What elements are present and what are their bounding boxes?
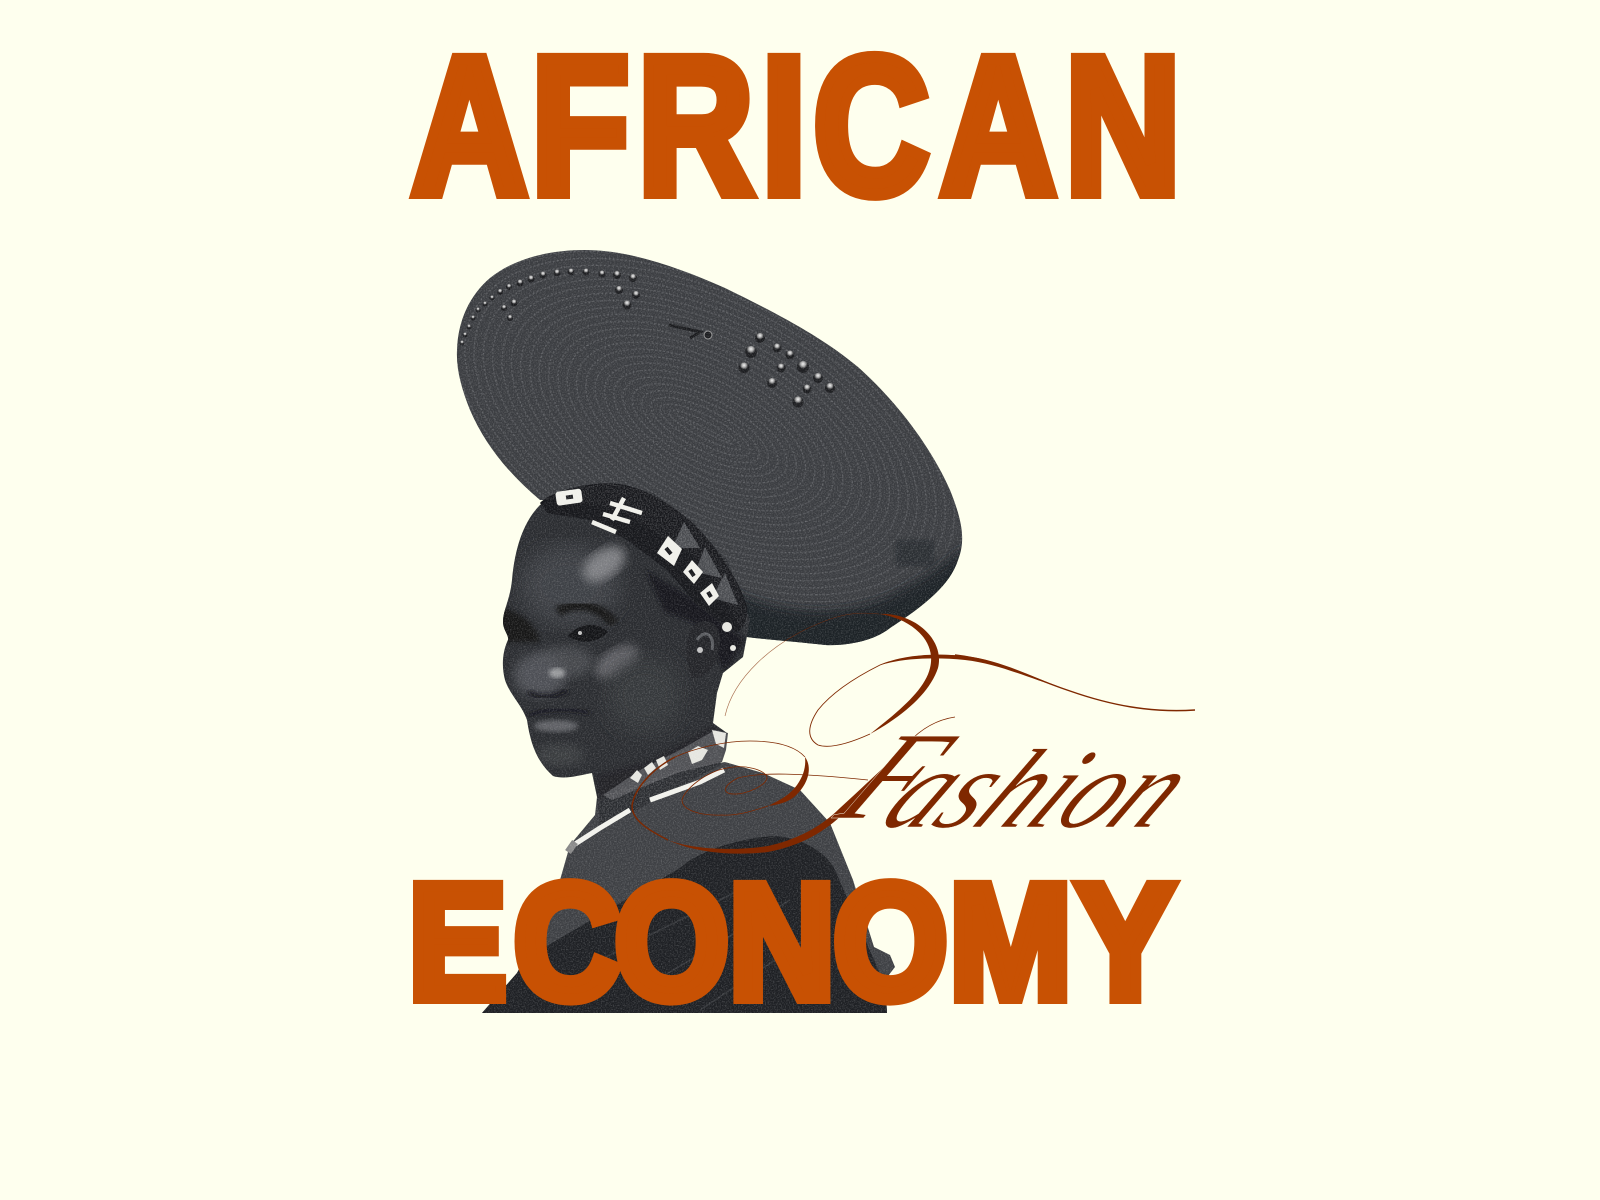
nose — [514, 653, 566, 697]
title: ECONOMY: ECONOMY — [409, 851, 1174, 1033]
beaded necklace — [568, 730, 728, 852]
word: ashion — [859, 727, 1223, 852]
photo grain — [440, 240, 980, 1020]
photo: woman with wide-brimmed hat — [363, 148, 1047, 1020]
shoulders and torso — [470, 760, 900, 1020]
hair — [645, 570, 745, 672]
neck shadow — [595, 725, 725, 800]
hat — [456, 250, 962, 646]
flourish: lower spiral — [632, 717, 955, 840]
lips — [528, 710, 590, 716]
ear — [686, 621, 720, 678]
flourish: upper loop — [725, 613, 1195, 746]
title: AFRICAN: AFRICAN — [412, 17, 1181, 235]
brows and eyes — [498, 608, 540, 642]
hat pin — [669, 325, 712, 339]
hat beads — [460, 268, 835, 408]
stitched patch — [896, 540, 934, 566]
script word: Fashion with flourishes — [632, 613, 1237, 854]
hat underside shadow — [741, 544, 962, 646]
word: F — [811, 708, 980, 846]
headband — [540, 483, 747, 651]
head and neck — [495, 480, 755, 840]
